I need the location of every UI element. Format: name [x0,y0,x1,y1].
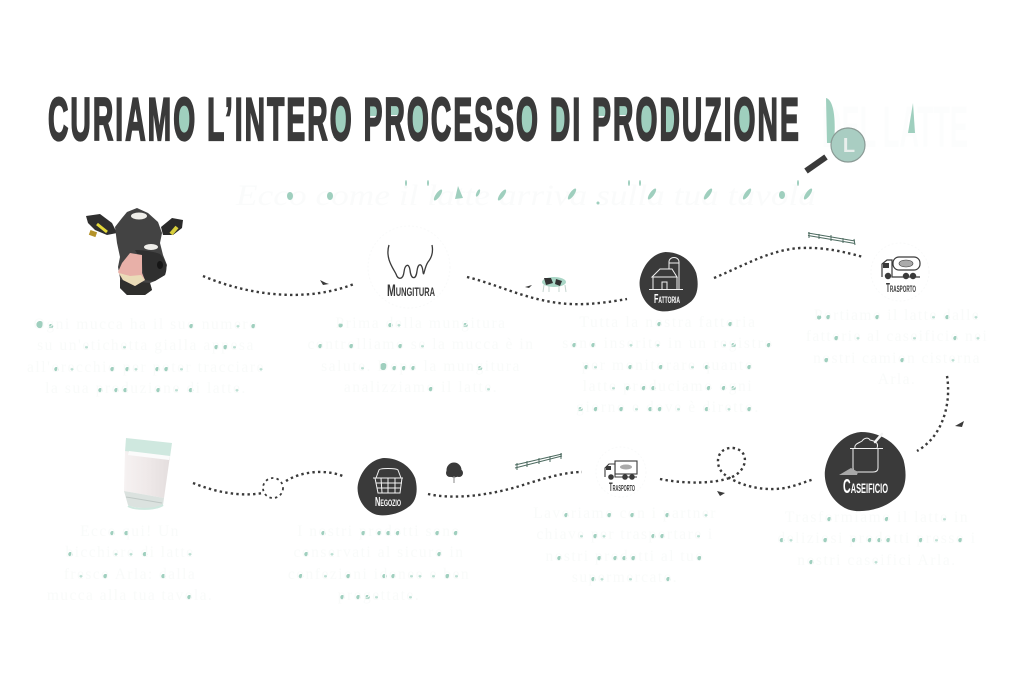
text: ogni mucca: la sua produzione di latte. [45,380,247,397]
text: portiamo il latte: Arla. [878,371,916,388]
text: trasformiamo il latte: Trasformiamo il latte in [785,509,969,526]
subtitle: Ecco come il latte arriva sulla tua tavola [235,179,816,212]
text: i nostri prodotti: progettate. [338,587,420,604]
text: portiamo il latte [806,307,988,388]
text: trasformiamo il latte: nostri caseifici Arla. [797,552,957,569]
text: lavoriamo con i partner: supermercato. [572,569,678,586]
text: lavoriamo con i partner: Lavoriamo con i partner [533,505,717,522]
text: prima della mungitura: analizziamo il latte. [344,379,498,396]
icon: caseificio pot blob: Caseificio [843,476,888,498]
text: ecco qui [47,523,213,604]
text: trasformiamo il latte [777,509,977,569]
text: ogni mucca: su un'etichetta gialla appesa [37,337,255,354]
text: ecco qui: Ecco qui! Un [80,523,180,540]
text: tutta la nostra fattoria: latte produciamo ogni [583,378,753,395]
text: portiamo il latte: fattorie al caseificio nei [806,328,988,345]
text: trasformiamo il latte: deliziosi prodotti presso i [777,530,977,547]
text: portiamo il latte: nostri camion cisterna [813,350,981,367]
text: i nostri prodotti: confezioni idonee e ben [288,566,470,583]
text: ogni mucca [27,316,265,397]
text: tutta la nostra fattoria: Tutta la nostra fattoria [579,314,757,331]
text: ogni mucca: Ogni mucca ha il suo numero [34,316,258,333]
text: tutta la nostra fattoria [562,314,774,416]
icon: trasporto delivery truck: Trasporto [609,480,635,494]
text: tutta la nostra fattoria: per monitorare quanto [582,357,754,374]
text: lavoriamo con i partner [533,505,717,586]
text: prima della mungitura: controlliamo se la mucca è in [307,336,535,353]
text: tutta la nostra fattoria: giorno e dove è diretto. [576,399,760,416]
text: ecco qui: fresco Arla: dalla [64,566,196,583]
text: ecco qui: mucca alla tua tavola. [47,587,213,604]
text: prima della mungitura: salute. Dopo la mungitura [321,358,521,375]
text: prima della mungitura [307,315,535,396]
logo: del latte with magnifier: L [843,135,855,157]
title: CURIAMO L’INTERO PROCESSO DI PRODUZIONE [48,86,801,153]
text: lavoriamo con i partner: chiave per trasportare i [536,526,714,543]
text: lavoriamo con i partner: nostri prodotti al tuo [546,548,704,565]
text: tutta la nostra fattoria: sono inserite in un registro [562,335,774,352]
text: ecco qui: bicchiere di latte [66,544,194,561]
text: i nostri prodotti [288,523,470,604]
text: portiamo il latte: Portiamo il latte dalle [814,307,980,324]
icon: fattoria barn blob: Fattoria [654,291,680,306]
icon: mungitura udder with label: Mungitura [387,281,435,300]
text: i nostri prodotti: conservati al sicuro in [294,544,464,561]
text: prima della mungitura: Prima della mungitura [335,315,507,332]
text: i nostri prodotti: I nostri prodotti sono [297,523,461,540]
icon: trasporto tanker truck: Trasporto [886,281,916,295]
text: ogni mucca: all'orecchio per poter tracciare [27,359,265,376]
icon: negozio basket blob: Negozio [375,495,401,509]
